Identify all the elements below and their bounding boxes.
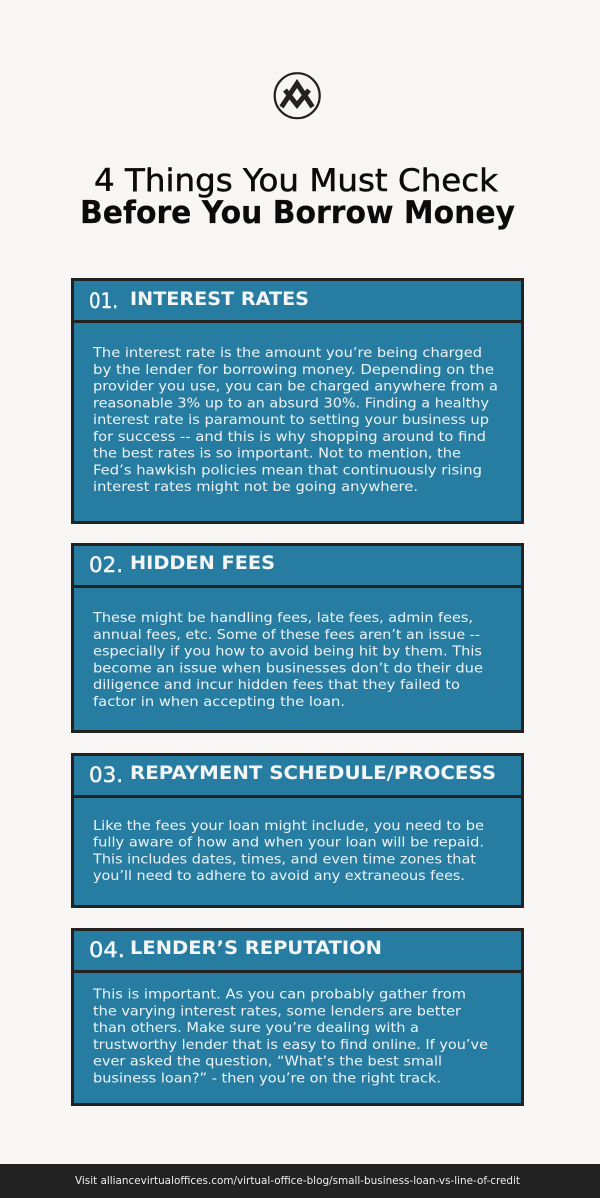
- number 02: 02.: [89, 553, 123, 578]
- body text: annual fees, etc. Some of these fees aren’t an issue --: [93, 627, 480, 643]
- body text: These might be handling fees, late fees, admin fees,: [92, 610, 473, 626]
- title: 4 Things You Must Check: [94, 163, 498, 199]
- panel: interest rates: [72, 280, 523, 522]
- heading: lender's reputation: LENDER’S REPUTATION: [130, 937, 382, 959]
- heading: repayment schedule: REPAYMENT SCHEDULE/PROCESS: [130, 762, 496, 784]
- body text: the varying interest rates, some lenders are better: [93, 1003, 461, 1019]
- body text: [92, 818, 484, 884]
- panel: lender's reputation: [72, 930, 523, 1104]
- title: Before You Borrow Money: [80, 195, 515, 231]
- body text: [92, 986, 488, 1086]
- panel: repayment schedule: [72, 754, 523, 906]
- body text: become an issue when businesses don’t do their due: [93, 660, 483, 676]
- body text: business loan?” - then you’re on the right track.: [93, 1070, 441, 1086]
- body text: reasonable 3% up to an absurd 30%. Finding a healthy: [93, 395, 489, 411]
- body text: Fed’s hawkish policies mean that continuously rising: [93, 462, 482, 478]
- number 04: 04.: [89, 938, 125, 963]
- body text: you’ll need to adhere to avoid any extraneous fees.: [93, 868, 465, 884]
- footer bar: [0, 1164, 600, 1198]
- number 01: 01.: [89, 289, 118, 314]
- number 03: 03.: [89, 763, 123, 788]
- body text: The interest rate is the amount you’re being charged: [92, 345, 482, 361]
- body text: interest rate is paramount to setting your business up: [93, 412, 489, 428]
- body text: factor in when accepting the loan.: [93, 694, 345, 710]
- body text: than others. Make sure you’re dealing with a: [93, 1020, 419, 1036]
- body text: This is important. As you can probably gather from: [92, 986, 466, 1002]
- footer link text: Visit alliancevirtualoffices.com/virtual-office-blog/small-business-loan-vs-line-of-credit: [75, 1176, 520, 1187]
- icon: logo: [275, 73, 320, 118]
- heading: hidden fees: HIDDEN FEES: [130, 552, 275, 574]
- body text: Like the fees your loan might include, you need to be: [93, 818, 484, 834]
- body text: the best rates is so important. Not to mention, the: [93, 446, 461, 462]
- heading: interest rates: INTEREST RATES: [130, 288, 309, 310]
- body text: This includes dates, times, and even time zones that: [92, 851, 476, 867]
- body text: especially if you how to avoid being hit by them. This: [93, 644, 482, 660]
- body text: diligence and incur hidden fees that they failed to: [93, 677, 460, 693]
- panel: hidden fees: [72, 544, 523, 732]
- body text: provider you use, you can be charged anywhere from a: [93, 378, 498, 394]
- body text: ever asked the question, “What’s the best small: [93, 1054, 442, 1070]
- title: [80, 163, 515, 231]
- body text: interest rates might not be going anywhere.: [93, 479, 418, 495]
- body text: [92, 610, 483, 710]
- body text: by the lender for borrowing money. Depending on the: [93, 362, 494, 378]
- body text: for success -- and this is why shopping around to find: [93, 429, 486, 445]
- body text: [92, 345, 498, 495]
- body text: fully aware of how and when your loan will be repaid.: [93, 835, 484, 851]
- body text: trustworthy lender that is easy to find online. If you’ve: [93, 1037, 488, 1053]
